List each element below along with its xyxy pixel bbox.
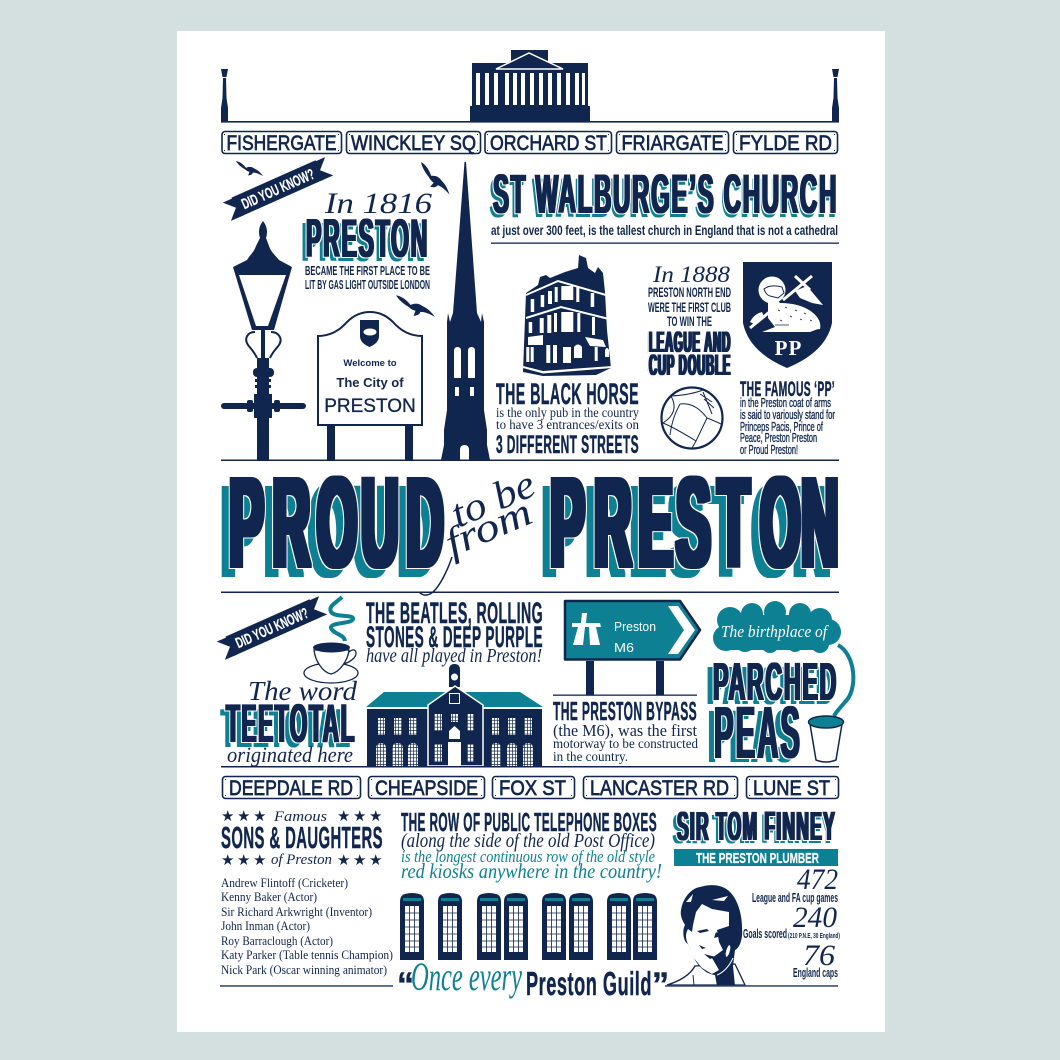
icon: seagull 1 [236, 161, 263, 176]
street signs row 1: WINCKLEY SQ [351, 132, 476, 155]
main title: Proud to be from Preston [221, 453, 838, 602]
parched peas: PEAS [708, 695, 796, 778]
list of names: John Inman (Actor) [221, 918, 310, 933]
body line 2: motorway to be constructed [553, 736, 698, 751]
script: In 1888: In 1888 [652, 262, 731, 287]
icon: St Walburge's church spire [441, 162, 490, 460]
speech cloud [713, 601, 853, 716]
icon: seagull 2 [414, 162, 457, 195]
banner [674, 849, 838, 866]
street signs row 2: FOX ST [499, 777, 566, 800]
text line 1: PRESTON NORTH END [648, 284, 731, 300]
stat note: (210 P.N.E, 30 England) [788, 933, 840, 940]
Sir Tom Finney [665, 803, 840, 987]
text: gas light line 1: BECAME THE FIRST PLACE TO BE [305, 264, 430, 278]
St Walburge's heading [490, 162, 839, 244]
body line 1: in the Preston coat of arms [740, 396, 831, 410]
script: from: from [438, 489, 538, 565]
text: LEAGUE AND [649, 326, 731, 359]
text line 3: TO WIN THE [667, 313, 712, 329]
script line 3: red kiosks anywhere in the country! [401, 859, 662, 883]
Black Horse text [496, 378, 639, 459]
icon: old town hall building [366, 664, 543, 766]
script: In 1816: In 1816 [324, 187, 432, 220]
list of names: Roy Barraclough (Actor) [221, 933, 333, 948]
list of names: Nick Park (Oscar winning animator) [221, 962, 387, 977]
icon: victorian street lamp [221, 221, 306, 460]
street signs row 2: CHEAPSIDE [375, 777, 478, 800]
body line 2: to have 3 entrances/exits on [496, 417, 639, 432]
stat: 472: 472 [797, 863, 838, 896]
body line 2: is said to variously stand for [740, 408, 835, 422]
text line 2: WERE THE FIRST CLUB [648, 299, 731, 315]
Beatles story [366, 597, 543, 667]
text: THE ROW OF PUBLIC TELEPHONE BOXES [401, 807, 657, 837]
parched peas [707, 601, 853, 778]
heading: Preston Guild: Preston Guild [526, 965, 652, 1002]
body line 5: or Proud Preston! [740, 443, 798, 457]
telephone boxes story [401, 807, 662, 883]
banner text: THE PRESTON PLUMBER [696, 850, 819, 867]
sign text: Preston: Preston [614, 620, 656, 634]
text: PARCHED [713, 652, 838, 712]
quote: once every Preston Guild [397, 954, 670, 1004]
street signs row 1: FYLDE RD [739, 132, 832, 155]
text: THE BLACK HORSE [496, 378, 639, 411]
parched peas: PARCHED [707, 656, 835, 716]
text: SIR TOM FINNEY [677, 803, 836, 849]
text: SIR TOM FINNEY [673, 806, 835, 852]
Preston bypass text [553, 696, 698, 764]
list of names: Kenny Baker (Actor) [221, 889, 317, 904]
text: STONES & DEEP PURPLE [366, 621, 543, 654]
list of names: Katy Parker (Table tennis Champion) [221, 947, 393, 962]
script: famous: Famous [273, 809, 327, 825]
text: THE PRESTON BYPASS [553, 696, 697, 726]
street signs row 2: LUNE ST [753, 777, 830, 800]
text: TEETOTAL [226, 692, 356, 754]
title: Preston: PRESTON [550, 453, 838, 593]
closing quote: ” [652, 966, 670, 1004]
stat: 76: 76 [803, 939, 835, 972]
icon: row of telephone boxes [400, 893, 657, 960]
stars top: ★★★★★★ [221, 807, 382, 825]
script: originated here: originated here [227, 742, 353, 767]
icon: steam [330, 597, 353, 641]
ribbon: did you know (top): DID YOU KNOW? [239, 166, 317, 213]
sign text: Preston: PRESTON [324, 396, 416, 417]
street signs row 2: DEEPDALE RD [229, 777, 353, 800]
script: the word: The word [248, 676, 358, 706]
museum building [470, 50, 590, 122]
text: THE BEATLES, ROLLING [366, 597, 543, 630]
motorway sign [565, 601, 700, 695]
text: 3 DIFFERENT STREETS [496, 431, 639, 459]
famous sons and daughters: SONS & DAUGHTERS [221, 820, 383, 855]
icon: motorway symbol [572, 613, 601, 645]
icon: chevron [668, 606, 695, 654]
script line 1: (along the side of the old Post Office) [401, 830, 655, 852]
text: PRESTON [306, 207, 429, 269]
icon: seagull 3 [396, 295, 435, 317]
title: Proud: PROUD [229, 453, 444, 593]
text: CUP DOUBLE [647, 350, 731, 383]
icon: portrait of Tom Finney [667, 885, 745, 986]
sign text: the city of: The City of [336, 375, 404, 390]
skyline: museum and lamp posts [221, 50, 839, 123]
title shadow: Proud: PROUD [221, 462, 436, 602]
stars bottom: ★★★★★★ [221, 851, 382, 869]
sign text: M6: M6 [614, 640, 634, 655]
icon: vintage football [662, 388, 722, 448]
street signs row 2: LANCASTER RD [590, 777, 729, 800]
crest letters: PP [775, 336, 802, 360]
icon: cup of peas [808, 716, 844, 762]
body line 1: (the M6), was the first [553, 721, 697, 740]
script line: have all played in Preston! [366, 645, 542, 667]
icon: the Black Horse pub [523, 255, 612, 376]
ribbon: did you know (middle) [216, 595, 327, 660]
script line 2: is the longest continuous row of the old style [401, 847, 655, 866]
small lamp post right [832, 69, 839, 122]
ribbon: did you know (top) [222, 156, 333, 221]
text: TEETOTAL [221, 697, 351, 759]
text: PRESTON [302, 211, 426, 273]
script: of Preston: of Preston [271, 852, 332, 868]
text: CUP DOUBLE [649, 349, 731, 382]
icon: Preston North End shield crest [743, 262, 832, 368]
title shadow: Preston: PRESTON [542, 462, 830, 602]
opening quote: “ [397, 966, 415, 1004]
icon: small crest [360, 320, 379, 347]
text: LEAGUE AND [647, 327, 731, 360]
list of names: Sir Richard Arkwright (Inventor) [221, 904, 372, 919]
poster sheet [177, 31, 885, 1032]
sign text: welcome to: Welcome to [343, 358, 397, 369]
the famous PP text [740, 378, 835, 457]
parched peas: PEAS [714, 691, 802, 774]
stat label: league and FA cup games: League and FA cup games [752, 891, 838, 905]
street signs row 2 [222, 776, 838, 800]
welcome to the city of Preston road sign [318, 312, 422, 460]
stat label: England caps: England caps [793, 966, 838, 980]
stat label: goals scored: Goals scored [743, 927, 787, 941]
famous sons and daughters [220, 807, 393, 987]
street signs row 1: ORCHARD ST [490, 132, 607, 155]
script: the birthplace of: The birthplace of [721, 622, 829, 641]
street signs row 1: FISHERGATE [226, 132, 336, 155]
stat: 240: 240 [793, 901, 837, 934]
subheading: at just over 300 feet, is the tallest church in England that is not a cathedral [491, 223, 838, 238]
teetotal story [221, 676, 358, 767]
1888 league and cup double [647, 262, 731, 383]
body line 3: in the country. [553, 749, 628, 764]
script: to be: to be [444, 461, 542, 536]
text: gas light line 2: LIT BY GAS LIGHT OUTSIDE LONDON [305, 278, 430, 292]
body line 1: is the only pub in the country [496, 405, 639, 420]
list of names: Andrew Flintoff (Cricketer) [221, 875, 348, 890]
list of names [221, 875, 393, 977]
body line 3: Princeps Pacis, Prince of [740, 420, 823, 434]
small lamp post left [221, 69, 228, 122]
street signs row 1 [222, 132, 838, 155]
script: once every: Once every [411, 954, 522, 999]
ribbon: did you know (middle): DID YOU KNOW? [233, 605, 311, 652]
icon: tea cup and saucer [304, 643, 358, 683]
text: THE FAMOUS ‘PP’ [740, 378, 835, 401]
gas light story [302, 187, 432, 292]
body line 4: Peace, Preston Preston [740, 431, 817, 445]
street signs row 1: FRIARGATE [622, 132, 724, 155]
